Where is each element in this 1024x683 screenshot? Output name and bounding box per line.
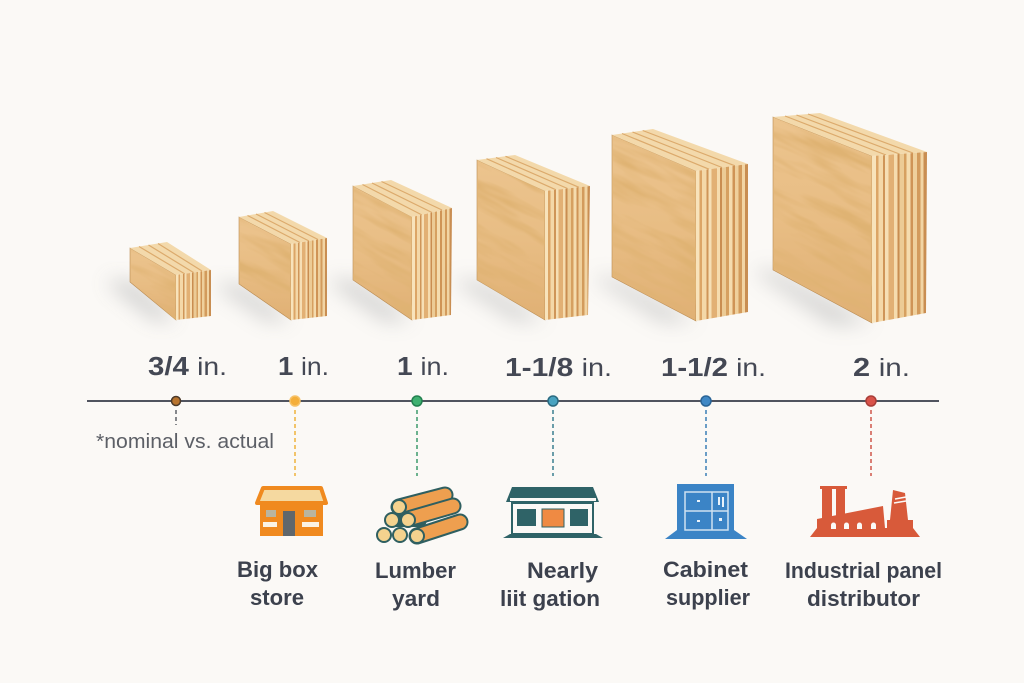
footnote: *nominal vs. actual (96, 430, 274, 453)
label: Cabinet supplier: Cabinet (663, 557, 749, 582)
marker: 1-1/2 in. blue (701, 396, 711, 476)
size label: 1-1/8 in.: 1-1/8 in. (505, 352, 612, 382)
marker: 1 in. orange (290, 396, 300, 476)
marker: 2 in. red (866, 396, 876, 476)
label: Big box store (237, 557, 319, 610)
panel: 1 in. block (218, 211, 327, 327)
block edge layers (176, 270, 211, 320)
marker: 3/4 in. (172, 396, 180, 425)
label: Big box store: Big box (237, 557, 319, 582)
block front face (773, 117, 872, 323)
label: Industrial panel distributor (785, 558, 942, 611)
label: Cabinet supplier (663, 557, 750, 610)
icon: lumber yard logs (377, 495, 460, 543)
label: Nearly liit gation (500, 558, 600, 611)
label: Lumber yard (375, 558, 456, 611)
size label: 1-1/2 in.: 1-1/2 in. (661, 352, 766, 382)
panel: 1-1/8 in. block (460, 155, 590, 327)
block edge layers (412, 208, 452, 320)
icon: nearby building (503, 487, 603, 538)
label: Lumber yard: Lumber (375, 558, 456, 583)
block front face (239, 217, 291, 320)
marker: 1-1/8 in. teal (548, 396, 558, 476)
size label: 1 in.: 1 in. (278, 351, 329, 381)
panel: 3/4 in. block (109, 242, 211, 326)
icon: factory (810, 486, 920, 537)
block edge layers (872, 152, 927, 323)
block front face (612, 135, 696, 321)
block front face (353, 186, 412, 320)
label: Nearly liit gation: liit gation (500, 586, 600, 611)
label: Industrial panel distributor: Industrial panel (785, 558, 942, 583)
label: Lumber yard: yard (392, 586, 440, 611)
timeline axis (87, 400, 939, 402)
panel: 1 in. block second (332, 180, 452, 328)
block top layers (612, 129, 748, 171)
block edge layers (545, 186, 590, 320)
block top layers (130, 242, 211, 275)
icon: big box store (257, 488, 326, 536)
icon: cabinet (665, 484, 747, 539)
block front face (477, 160, 545, 320)
label: Nearly liit gation: Nearly (527, 558, 599, 583)
block top layers (773, 113, 927, 156)
block top layers (477, 155, 590, 191)
label: Cabinet supplier: supplier (666, 585, 750, 610)
panel: 1-1/2 in. block (600, 129, 748, 328)
size label: 1 in. second: 1 in. (397, 351, 449, 381)
size label: 2 in.: 2 in. (853, 352, 910, 382)
label: Industrial panel distributor: distributor (807, 586, 920, 611)
block front face (130, 248, 176, 320)
size label: 3/4 in.: 3/4 in. (148, 351, 227, 381)
block top layers (239, 211, 327, 244)
marker: 1 in. green (412, 396, 422, 476)
block edge layers (291, 238, 327, 320)
panel: 2 in. block (760, 113, 927, 332)
label: Big box store: store (250, 585, 304, 610)
block edge layers (696, 164, 748, 321)
block top layers (353, 180, 452, 217)
